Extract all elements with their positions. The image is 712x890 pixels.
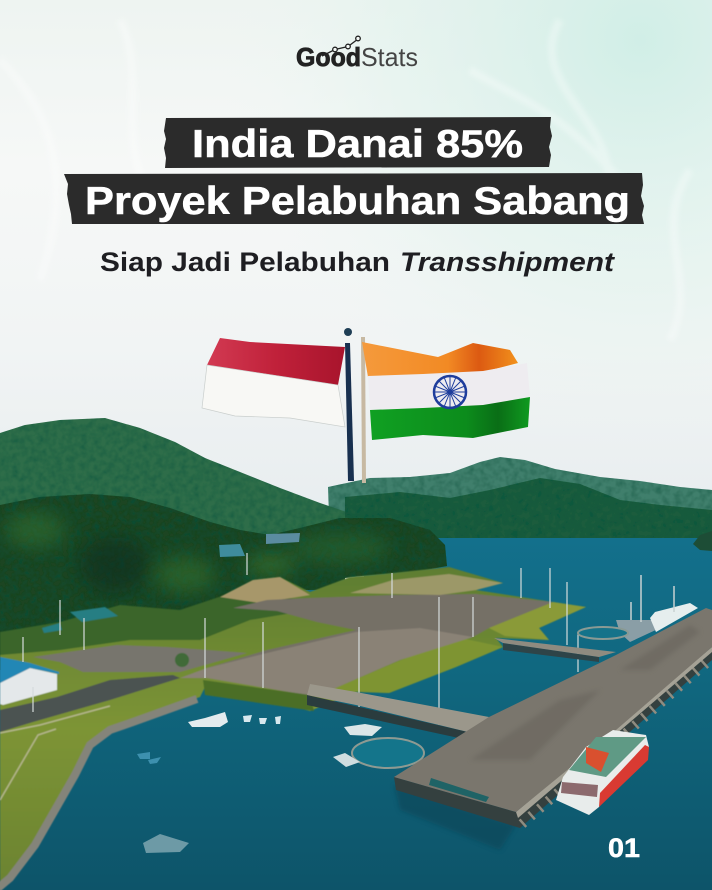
quarry cliff bbox=[220, 577, 310, 603]
pier legs bbox=[394, 647, 712, 828]
pier edge bbox=[516, 647, 712, 818]
upper side pier bbox=[494, 638, 616, 662]
India pole bbox=[361, 337, 366, 483]
warehouse bbox=[0, 657, 59, 705]
sand strip bbox=[350, 574, 503, 595]
logo wordmark: Good bbox=[296, 42, 361, 72]
land bbox=[0, 567, 586, 890]
light poles bbox=[23, 553, 578, 725]
India flag bbox=[362, 342, 530, 440]
orange deckhouse bbox=[586, 747, 609, 772]
title bar 1 bbox=[164, 117, 552, 168]
floating ring upper bbox=[578, 627, 628, 639]
forest shrubs on slope bbox=[0, 590, 310, 655]
mid right hills bbox=[345, 478, 712, 545]
left mountain bbox=[0, 418, 370, 545]
mountains bbox=[0, 418, 712, 545]
floating ring lower bbox=[352, 738, 424, 768]
red ship bbox=[556, 730, 649, 815]
icon: trend line bbox=[322, 36, 360, 56]
logo wordmark: Stats bbox=[361, 42, 418, 72]
sea bbox=[0, 538, 712, 890]
road bbox=[0, 675, 180, 732]
tree bbox=[175, 653, 189, 667]
title bar 2: Proyek Pelabuhan Sabang bbox=[85, 180, 630, 223]
containers bbox=[429, 778, 489, 802]
hill buildings bbox=[219, 533, 364, 586]
subtitle: Transshipment bbox=[400, 247, 615, 277]
deck wear patches bbox=[470, 625, 700, 760]
Indonesia pole bbox=[344, 328, 354, 481]
ship hull bbox=[556, 730, 649, 815]
upper apron bbox=[207, 594, 553, 668]
red hull side bbox=[599, 745, 649, 807]
ship deck bbox=[569, 737, 646, 777]
far ship bbox=[616, 575, 698, 642]
grass land bbox=[0, 567, 586, 890]
Indonesia flag bbox=[202, 338, 345, 427]
subtitle: Siap Jadi Pelabuhan bbox=[100, 247, 390, 277]
side pier bbox=[307, 684, 489, 740]
flags bbox=[202, 328, 530, 483]
title bar 1: India Danai 85% bbox=[192, 123, 523, 166]
rocky shore bbox=[0, 699, 197, 888]
page number: 01 bbox=[608, 833, 640, 863]
title bbox=[64, 117, 644, 224]
teal sheds bbox=[42, 607, 118, 633]
moored boats bbox=[137, 712, 382, 853]
curb and footpath bbox=[0, 706, 110, 800]
main pier bbox=[394, 608, 712, 850]
logo: GoodStats bbox=[296, 36, 418, 72]
pier shadow bbox=[394, 785, 516, 850]
pier pillars bbox=[522, 658, 712, 824]
main apron bbox=[180, 628, 473, 695]
pier deck bbox=[394, 608, 712, 812]
front bank bbox=[203, 680, 314, 711]
stern windows bbox=[561, 782, 598, 797]
parking lot bbox=[33, 645, 247, 672]
Ashoka Chakra bbox=[434, 376, 466, 408]
forest bbox=[0, 494, 447, 670]
small island bbox=[693, 531, 712, 551]
green tip bbox=[489, 602, 586, 640]
background sky bbox=[0, 0, 712, 560]
far right mountains bbox=[328, 457, 712, 545]
grass bank by basin bbox=[331, 637, 503, 693]
forest light patches bbox=[5, 512, 390, 593]
